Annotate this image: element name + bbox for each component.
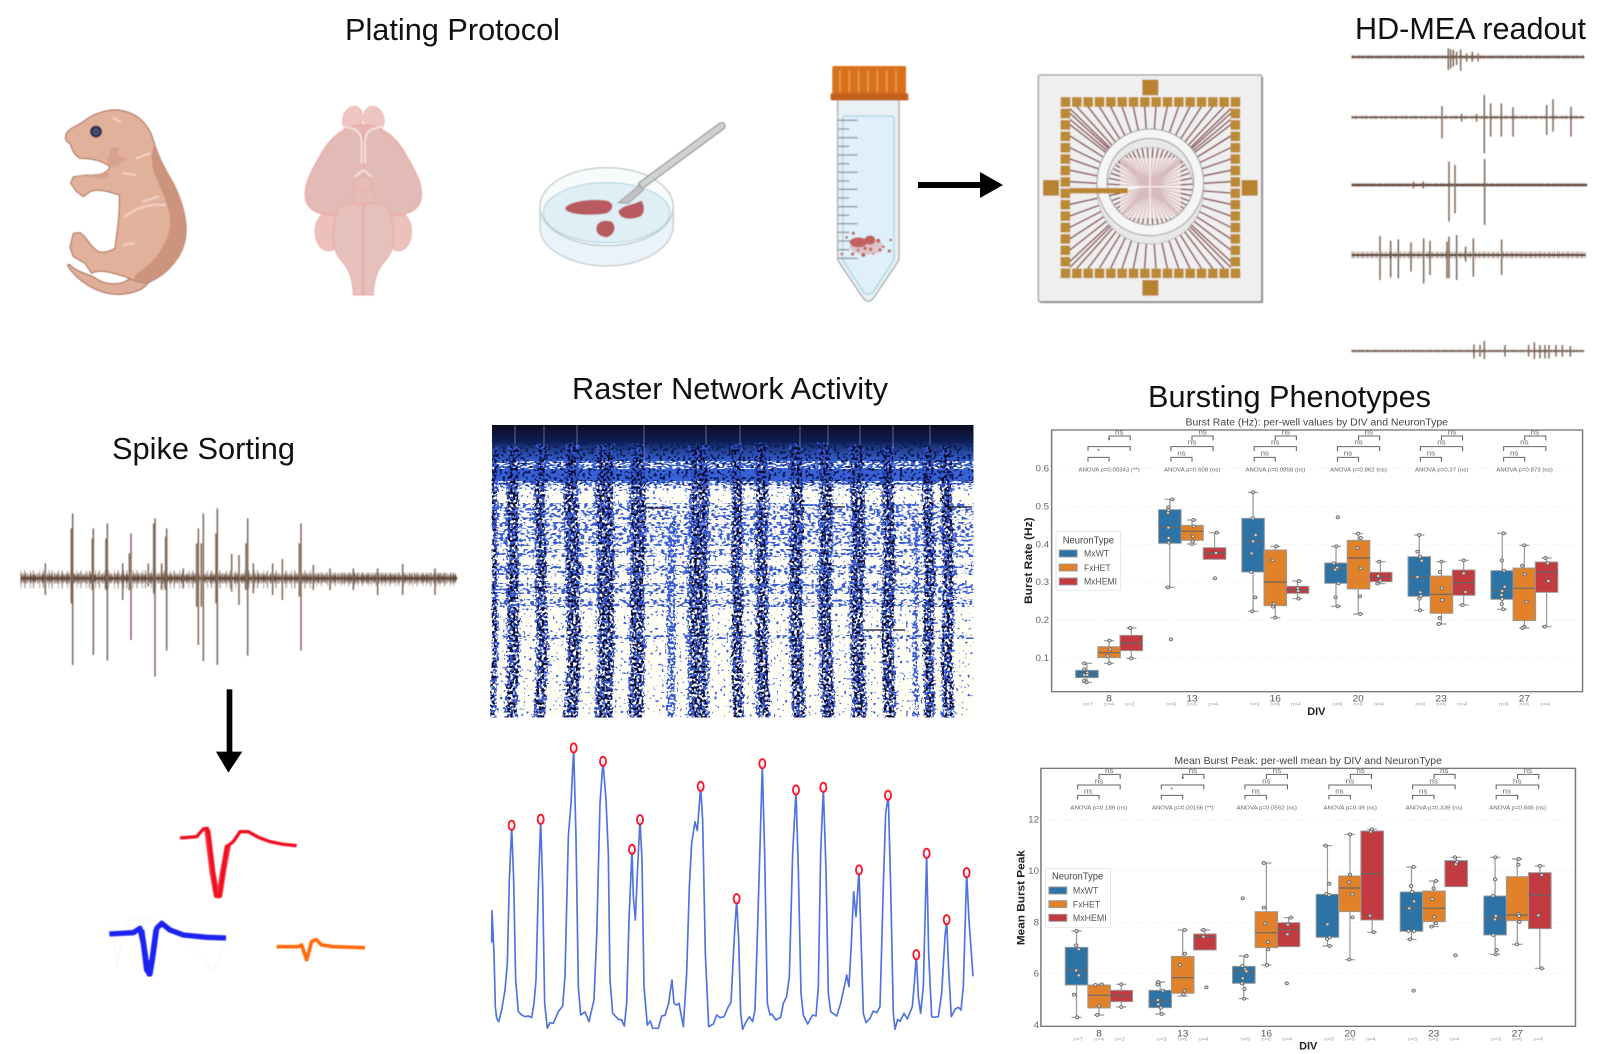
boxes DIV 27: [1491, 532, 1558, 630]
y axis label: Burst Rate (Hz): [1024, 517, 1035, 604]
x axis group labels: n=9: [1415, 702, 1425, 708]
x axis group labels: n=9: [1240, 1037, 1250, 1043]
significance brackets: *: [1181, 774, 1184, 783]
ANOVA annotations: ANOVA p=0.862 (ns): [1330, 468, 1387, 474]
x axis group labels: [1083, 694, 1550, 708]
icon: HD-MEA chip: [1038, 75, 1263, 303]
x axis group labels: n=4: [1208, 702, 1218, 708]
boxes DIV 20: [1325, 516, 1392, 616]
trace 4: [1352, 235, 1586, 283]
x axis group labels: 27: [1512, 1029, 1523, 1039]
x axis group labels: 20: [1353, 694, 1364, 705]
spike sorting raw trace: [21, 508, 457, 677]
x axis group labels: n=4: [1374, 702, 1384, 708]
y axis ticks: 0.6: [1035, 463, 1049, 473]
trace 2: [1352, 95, 1584, 153]
x axis group labels: n=9: [1250, 702, 1259, 708]
icon: petri dish with tissue and scalpel: [540, 126, 722, 266]
x axis group labels: n=9: [1166, 702, 1176, 708]
x axis group labels: [1073, 1029, 1543, 1043]
ANOVA annotations: ANOVA p=0.37 (ns): [1415, 468, 1468, 474]
significance brackets: ns: [1513, 777, 1522, 785]
legend: [1056, 531, 1121, 590]
x axis group labels: n=4: [1457, 702, 1467, 708]
significance brackets: ns: [1354, 438, 1363, 447]
ANOVA annotations: ANOVA p=0.00343 (**): [1079, 468, 1140, 474]
x axis group labels: n=6: [1345, 1037, 1355, 1043]
x axis group labels: 13: [1186, 694, 1198, 705]
trace 1: [1352, 48, 1584, 71]
legend: MxHEMI: [1084, 576, 1117, 587]
population firing rate trace with detected peaks: [492, 743, 973, 1029]
boxes DIV 13: [1149, 928, 1216, 1016]
y axis ticks: [1035, 463, 1049, 663]
y axis ticks: [1028, 814, 1039, 1030]
y axis ticks: 0.2: [1035, 614, 1049, 625]
x axis group labels: n=4: [1291, 702, 1301, 708]
significance brackets: ns: [1271, 438, 1280, 447]
title: Bursting Phenotypes: Bursting Phenotypes: [1148, 379, 1431, 414]
raster plot of network activity: [488, 425, 978, 730]
ANOVA annotations: [1079, 468, 1553, 474]
x axis group labels: n=6: [1261, 1037, 1271, 1043]
title: Plating Protocol: Plating Protocol: [345, 12, 560, 47]
significance brackets: [1078, 766, 1539, 799]
x axis group labels: n=7: [1073, 1037, 1083, 1043]
significance brackets: *: [1108, 436, 1111, 445]
x axis group labels: n=7: [1083, 702, 1093, 708]
significance brackets: ns: [1273, 766, 1281, 775]
y axis ticks: 10: [1028, 865, 1039, 876]
y axis ticks: 6: [1034, 968, 1039, 979]
icon: conical tube with dissociated cells: [831, 66, 908, 301]
x axis group labels: n=9: [1324, 1037, 1334, 1043]
chart: Burst Rate by DIV and NeuronType: [1024, 418, 1583, 718]
x axis group labels: n=6: [1436, 702, 1446, 708]
significance brackets: ns: [1510, 449, 1519, 457]
significance brackets: ns: [1252, 787, 1260, 796]
significance brackets: ns: [1531, 428, 1539, 436]
significance brackets: ns: [1419, 787, 1427, 796]
arrow: raw trace to sorted units: [216, 689, 242, 773]
boxes DIV 23: [1408, 533, 1475, 626]
significance brackets: ns: [1346, 777, 1354, 785]
y axis label: Mean Burst Peak: [1016, 850, 1028, 945]
x axis group labels: 23: [1435, 694, 1447, 705]
significance brackets: ns: [1084, 787, 1093, 796]
x axis group labels: n=4: [1449, 1037, 1459, 1043]
ANOVA annotations: ANOVA p=0.00166 (**): [1152, 806, 1214, 812]
x axis label: DIV: [1307, 706, 1326, 718]
y axis ticks: 0.3: [1035, 576, 1049, 587]
blue sorted unit waveform: [109, 920, 226, 974]
red sorted unit waveform: [180, 828, 297, 896]
x axis group labels: 27: [1519, 694, 1530, 705]
y axis ticks: 0.5: [1035, 501, 1049, 511]
x axis group labels: n=4: [1366, 1037, 1376, 1043]
significance brackets: ns: [1115, 428, 1124, 436]
y axis ticks: 4: [1034, 1019, 1039, 1030]
legend: NeuronType: [1063, 536, 1114, 546]
ANOVA annotations: ANOVA p=0.0562 (ns): [1237, 806, 1297, 812]
x axis group labels: 16: [1261, 1029, 1272, 1039]
x axis group labels: 16: [1270, 694, 1281, 705]
significance brackets: ns: [1105, 766, 1114, 775]
significance brackets: ns: [1440, 766, 1449, 775]
x axis group labels: n=6: [1187, 702, 1197, 708]
y axis ticks: 12: [1028, 814, 1039, 825]
x axis group labels: n=4: [1282, 1037, 1292, 1043]
x axis group labels: n=6: [1270, 702, 1280, 708]
y axis ticks: 8: [1034, 917, 1039, 927]
ANOVA annotations: ANOVA p=0.339 (ns): [1406, 806, 1463, 812]
boxes DIV 20: [1316, 828, 1383, 961]
boxes DIV 8: [1065, 929, 1133, 1019]
x axis group labels: n=6: [1353, 702, 1363, 708]
icon: neonatal rat pup: [65, 110, 186, 294]
HD-MEA voltage traces: [1352, 48, 1587, 359]
significance brackets: ns: [1344, 449, 1352, 457]
significance brackets: *: [1097, 447, 1100, 455]
legend: FxHET: [1073, 899, 1100, 909]
boxes DIV 16: [1233, 861, 1300, 1000]
x axis group labels: n=6: [1519, 702, 1529, 708]
significance brackets: ns: [1095, 777, 1103, 785]
arrow: tube to chip: [918, 172, 1003, 198]
legend: MxWT: [1084, 548, 1109, 559]
x axis group labels: n=6: [1429, 1037, 1439, 1043]
boxes DIV 16: [1242, 491, 1309, 619]
ANOVA annotations: ANOVA p=0.49 (ns): [1323, 806, 1377, 812]
boxes DIV 13: [1159, 498, 1226, 641]
x axis group labels: 13: [1177, 1029, 1188, 1039]
y axis ticks: 0.4: [1035, 539, 1049, 549]
significance brackets: ns: [1282, 428, 1290, 436]
significance brackets: ns: [1189, 766, 1197, 775]
x axis group labels: n=9: [1157, 1037, 1167, 1043]
legend: [1046, 868, 1110, 927]
ANOVA annotations: [1070, 806, 1546, 812]
title: HD-MEA readout: HD-MEA readout: [1355, 11, 1586, 46]
legend: FxHET: [1084, 562, 1111, 573]
boxes DIV 8: [1076, 626, 1143, 684]
significance brackets: ns: [1365, 428, 1373, 436]
ANOVA annotations: ANOVA p=0.0858 (ns): [1245, 468, 1305, 474]
significance brackets: ns: [1261, 449, 1269, 457]
legend: MxHEMI: [1073, 912, 1107, 923]
x axis group labels: 23: [1428, 1029, 1439, 1039]
x axis group labels: n=9: [1491, 1037, 1501, 1043]
significance brackets: ns: [1437, 438, 1446, 447]
legend: NeuronType: [1052, 872, 1104, 882]
significance brackets: ns: [1198, 428, 1207, 436]
orange sorted unit waveform: [277, 939, 365, 960]
legend: MxWT: [1073, 885, 1099, 895]
y axis ticks: 0.1: [1035, 652, 1049, 663]
significance brackets: ns: [1188, 438, 1196, 447]
significance brackets: ns: [1427, 449, 1435, 457]
x axis group labels: 20: [1344, 1029, 1356, 1039]
x axis group labels: n=4: [1199, 1037, 1208, 1043]
x axis group labels: n=9: [1333, 702, 1342, 708]
chart title: Burst Rate (Hz): per-well values by DIV and NeuronType: [1185, 418, 1448, 428]
significance brackets: ns: [1429, 777, 1438, 785]
title: Spike Sorting: Spike Sorting: [112, 431, 295, 466]
significance brackets: ns: [1448, 428, 1456, 436]
ANOVA annotations: ANOVA p=0.189 (ns): [1070, 806, 1127, 812]
x axis label: DIV: [1299, 1041, 1318, 1052]
trace 3: [1352, 159, 1587, 225]
chart: Mean Burst Peak by DIV and NeuronType: [1016, 756, 1575, 1052]
significance brackets: ns: [1524, 766, 1532, 775]
x axis group labels: n=4: [1104, 702, 1114, 708]
boxes DIV 27: [1484, 856, 1551, 970]
significance brackets: ns: [1335, 787, 1344, 796]
ANOVA annotations: ANOVA p=0.873 (ns): [1496, 468, 1553, 474]
x axis group labels: n=2: [1125, 702, 1135, 708]
x axis group labels: 8: [1096, 1029, 1102, 1039]
x axis group labels: n=9: [1408, 1037, 1417, 1043]
significance brackets: ns: [1177, 449, 1186, 457]
significance brackets: *: [1170, 785, 1173, 794]
trace 5: [1352, 341, 1584, 359]
significance brackets: ns: [1520, 438, 1529, 447]
x axis group labels: n=4: [1533, 1037, 1543, 1043]
x axis group labels: n=4: [1094, 1037, 1104, 1043]
significance brackets: ns: [1356, 766, 1365, 775]
x axis group labels: n=6: [1512, 1037, 1522, 1043]
ANOVA annotations: ANOVA p=0.608 (ns): [1164, 468, 1220, 474]
boxes DIV 23: [1400, 856, 1467, 992]
title: Raster Network Activity: Raster Network Activity: [572, 371, 888, 406]
x axis group labels: n=9: [1499, 702, 1509, 708]
significance brackets: [1088, 428, 1546, 462]
icon: mouse brain: [305, 104, 421, 295]
ANOVA annotations: ANOVA p=0.846 (ns): [1489, 806, 1546, 812]
x axis group labels: n=6: [1178, 1037, 1188, 1043]
significance brackets: ns: [1262, 777, 1271, 785]
x axis group labels: n=2: [1115, 1037, 1125, 1043]
chart title: Mean Burst Peak: per-well mean by DIV and NeuronType: [1174, 756, 1442, 767]
significance brackets: ns: [1503, 787, 1511, 796]
x axis group labels: n=4: [1540, 702, 1550, 708]
x axis group labels: 8: [1106, 694, 1112, 705]
